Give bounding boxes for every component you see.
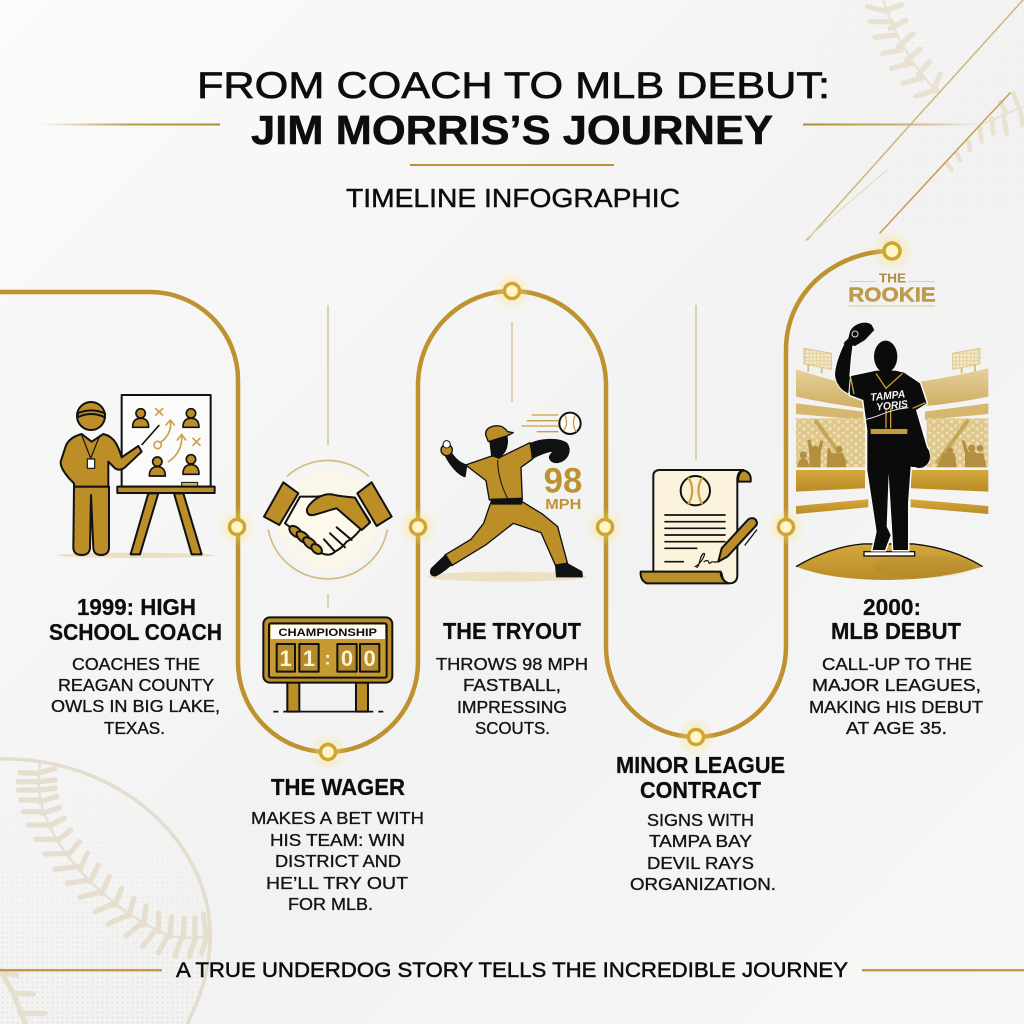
rookie logo — [848, 272, 936, 307]
text block: 2000 mlb debut: AT AGE 35. — [846, 718, 947, 738]
icon: pitcher throwing 98 mph: MPH — [545, 496, 581, 513]
timeline path — [0, 251, 885, 752]
icon: championship scoreboard: 1 — [303, 646, 315, 671]
text block: minor league contract — [616, 752, 785, 894]
title: JIM MORRIS’S JOURNEY — [251, 107, 773, 153]
icon: championship scoreboard: 0 — [341, 646, 353, 671]
text block: minor league contract: MINOR LEAGUE — [616, 752, 785, 778]
text block: 2000 mlb debut: MLB DEBUT — [831, 618, 961, 644]
text block: the tryout: SCOUTS. — [475, 718, 550, 738]
stadium stands — [796, 368, 988, 514]
text block: the wager: DISTRICT AND — [275, 851, 401, 871]
footer tagline: A TRUE UNDERDOG STORY TELLS THE INCREDIBLE JOURNEY — [176, 959, 848, 982]
rookie logo: ROOKIE — [848, 284, 936, 307]
text block: 1999 high school coach: COACHES THE — [72, 654, 200, 674]
decorative baseball: top right — [810, 0, 1024, 227]
text block: 1999 high school coach: 1999: HIGH — [77, 594, 196, 620]
timeline nodes — [217, 229, 914, 772]
text block: 1999 high school coach — [49, 594, 222, 738]
icon: signed contract — [641, 470, 757, 583]
thin connector: wager — [327, 305, 329, 445]
decorative baseball: bottom left — [0, 759, 210, 1024]
title rule: right — [803, 124, 983, 126]
title rule: under — [410, 164, 614, 166]
text block: the wager: HE’LL TRY OUT — [266, 873, 408, 893]
stadium lights — [804, 348, 980, 373]
text block: the tryout — [436, 618, 588, 738]
text block: minor league contract: ORGANIZATION. — [630, 874, 776, 894]
rookie logo: THE — [879, 272, 906, 286]
player silhouette: YORIS — [876, 398, 908, 414]
player silhouette — [835, 323, 930, 550]
icon: championship scoreboard: 0 — [364, 646, 376, 671]
icon: handshake — [264, 461, 392, 579]
text block: the wager: MAKES A BET WITH — [251, 808, 424, 828]
text block: the wager: FOR MLB. — [288, 894, 373, 914]
footer rule: left — [0, 969, 162, 971]
text block: 2000 mlb debut: MAKING HIS DEBUT — [809, 697, 983, 717]
text block: minor league contract: DEVIL RAYS — [647, 853, 754, 873]
text block: 2000 mlb debut — [809, 594, 983, 738]
thin connector: scoreboard — [327, 594, 329, 608]
pitcher's mound — [796, 544, 983, 580]
icon: championship scoreboard — [263, 617, 392, 712]
thin connector: contract — [695, 305, 697, 460]
text block: minor league contract: CONTRACT — [640, 777, 761, 803]
text block: the tryout: THROWS 98 MPH — [436, 654, 588, 674]
subtitle: TIMELINE INFOGRAPHIC — [346, 183, 680, 213]
title: FROM COACH TO MLB DEBUT: — [197, 65, 830, 106]
icon: championship scoreboard: 1 — [280, 646, 292, 671]
text block: minor league contract: TAMPA BAY — [649, 831, 752, 851]
text block: 1999 high school coach: OWLS IN BIG LAKE, — [51, 696, 220, 716]
text block: minor league contract: SIGNS WITH — [647, 810, 754, 830]
text block: the tryout: THE TRYOUT — [443, 618, 581, 644]
text block: 2000 mlb debut: 2000: — [863, 594, 921, 620]
icon: championship scoreboard: CHAMPIONSHIP — [278, 627, 377, 639]
text block: the wager: HIS TEAM: WIN — [270, 830, 405, 850]
text block: the wager — [251, 774, 424, 914]
footer rule: right — [862, 969, 1024, 971]
title — [197, 65, 830, 153]
icon: coach at whiteboard — [58, 395, 215, 558]
diagonal accent lines — [805, 0, 1023, 240]
thin connector: tryout — [511, 322, 513, 402]
title rule: left — [40, 124, 220, 126]
text block: 1999 high school coach: TEXAS. — [104, 718, 165, 738]
text block: 1999 high school coach: SCHOOL COACH — [49, 619, 222, 645]
icon: championship scoreboard: : — [325, 648, 331, 669]
panel: the rookie mlb debut scene — [796, 272, 988, 580]
text block: the wager: THE WAGER — [271, 774, 405, 800]
text block: 2000 mlb debut: MAJOR LEAGUES, — [812, 675, 981, 695]
player silhouette: TAMPA — [870, 388, 906, 404]
icon: pitcher throwing 98 mph: 98 — [544, 461, 582, 500]
text block: the tryout: FASTBALL, — [463, 675, 561, 695]
icon: pitcher throwing 98 mph — [427, 413, 587, 582]
text block: the tryout: IMPRESSING — [457, 697, 567, 717]
text block: 2000 mlb debut: CALL-UP TO THE — [822, 654, 972, 674]
text block: 1999 high school coach: REAGAN COUNTY — [58, 675, 214, 695]
